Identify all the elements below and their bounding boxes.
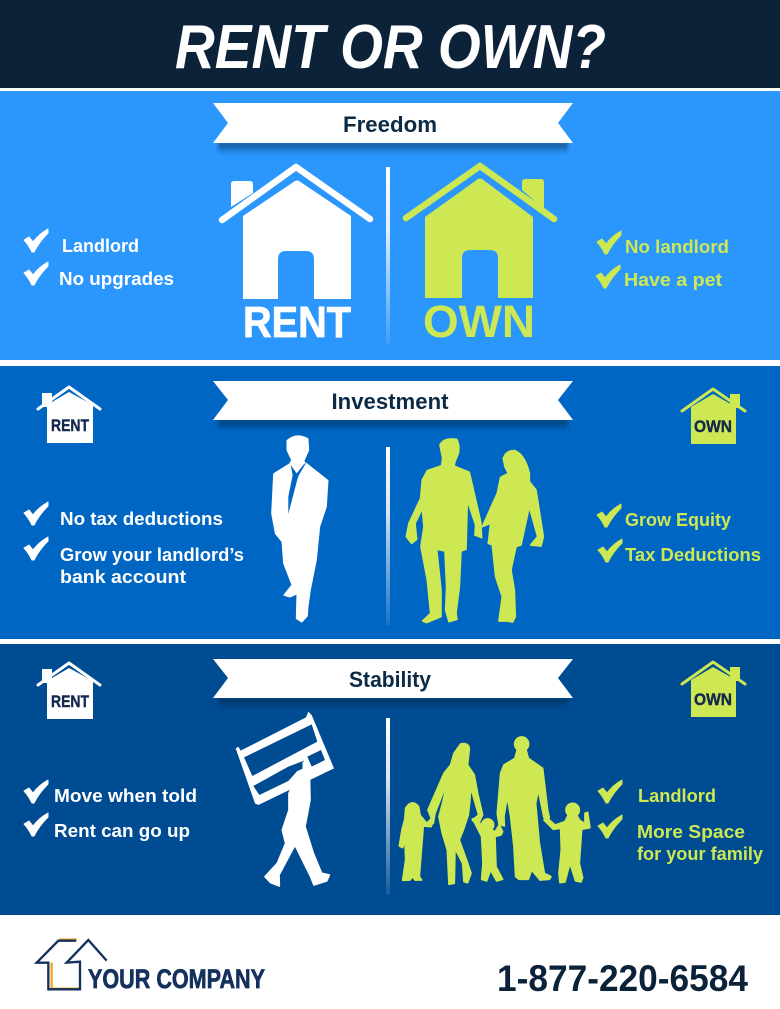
rent list: investment: No tax deductions: [60, 508, 223, 529]
rent list: stability: Rent can go up: [54, 820, 190, 841]
icon: own house: [406, 166, 554, 347]
icon: rent house: [222, 167, 370, 347]
rent list: freedom: Landlord: [62, 235, 139, 256]
silhouette: man in suit: [272, 436, 328, 622]
own list: stability: Landlord: [638, 785, 716, 806]
panel: stability: [0, 644, 780, 915]
rent list: investment: [24, 502, 244, 587]
own list: freedom: Have a pet: [624, 269, 722, 290]
ribbon: stability: [213, 659, 573, 709]
own list: freedom: [596, 231, 729, 290]
badge: own house: OWN: [694, 690, 732, 709]
ribbon: stability: Stability: [349, 667, 432, 692]
icon: own house: OWN: [423, 296, 535, 347]
ribbon: investment: Investment: [332, 389, 449, 414]
own list: stability: for your family: [637, 843, 764, 864]
badge: own house: OWN: [694, 417, 732, 436]
silhouette: couple: [406, 439, 543, 623]
divider: [386, 718, 390, 895]
divider: [386, 447, 390, 625]
title banner: [0, 0, 780, 88]
rent list: investment: Grow your landlord’s: [60, 544, 244, 565]
ribbon: investment: [213, 381, 573, 431]
title banner: RENT OR OWN?: [175, 13, 606, 82]
logo: your company: YOUR COMPANY: [88, 964, 265, 994]
icon: rent house: RENT: [243, 298, 351, 347]
badge: rent house: RENT: [51, 416, 90, 435]
own list: stability: More Space: [637, 821, 745, 842]
badge: own house: [682, 662, 745, 717]
badge: own house: [682, 389, 745, 444]
rent list: stability: Move when told: [54, 785, 197, 806]
own list: investment: Tax Deductions: [625, 544, 761, 565]
phone number: 1-877-220-6584: [497, 958, 748, 999]
divider: [386, 167, 390, 344]
badge: rent house: [38, 387, 100, 443]
rent list: stability: [24, 780, 197, 841]
own list: investment: Grow Equity: [625, 509, 732, 530]
ribbon: freedom: [213, 103, 573, 154]
rent list: freedom: [24, 229, 174, 289]
badge: rent house: [38, 663, 100, 719]
rent list: investment: bank account: [60, 566, 186, 587]
badge: rent house: RENT: [51, 692, 90, 711]
rent list: freedom: No upgrades: [59, 268, 174, 289]
ribbon: freedom: Freedom: [343, 112, 437, 137]
logo: your company: [37, 940, 265, 994]
panel: freedom: [0, 91, 780, 360]
own list: stability: [598, 780, 764, 864]
own list: investment: [597, 504, 761, 565]
own list: freedom: No landlord: [625, 236, 729, 257]
silhouette: person carrying furniture: [236, 712, 334, 886]
silhouette: family: [399, 737, 590, 884]
panel: investment: [0, 366, 780, 639]
